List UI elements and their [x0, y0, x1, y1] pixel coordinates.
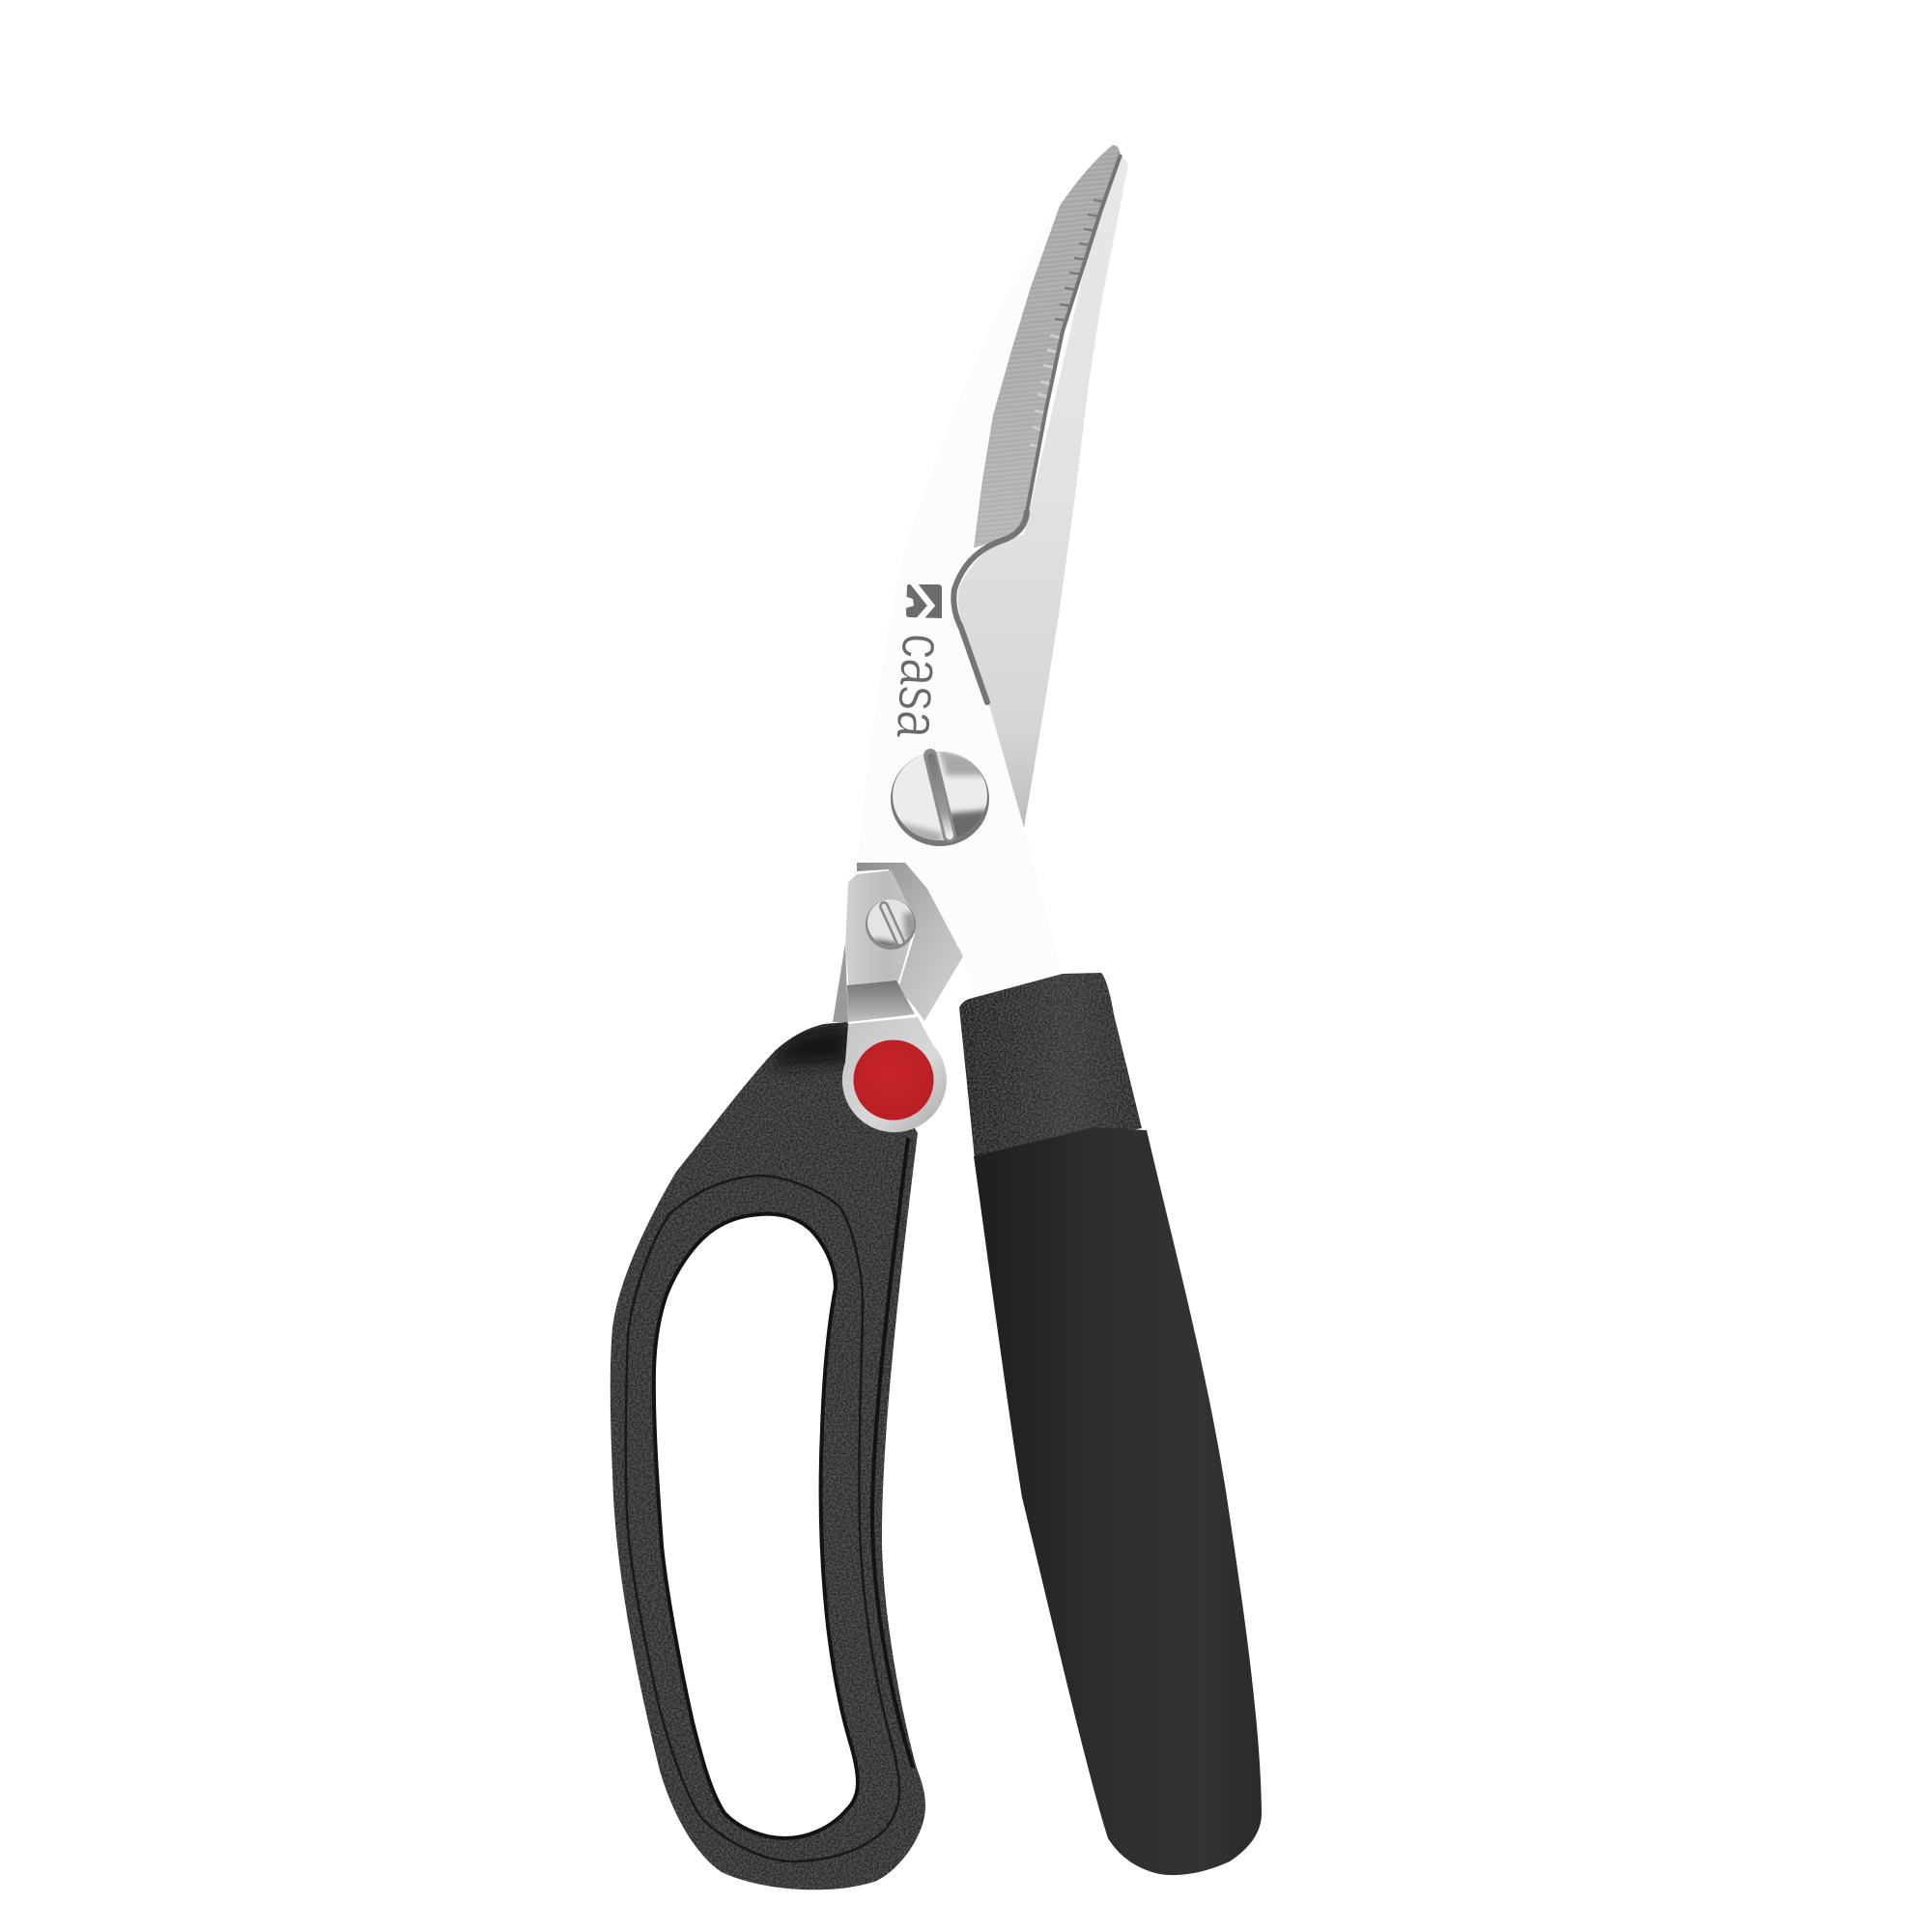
right handle: rubber grip	[974, 1127, 1262, 1875]
logo wordmark: casa	[883, 632, 956, 741]
brand mark: Casa logo	[883, 582, 956, 741]
logo icon	[904, 582, 942, 620]
red lock button	[854, 1039, 933, 1121]
brushed pivot plate	[857, 863, 963, 1021]
left handle: black moulded loop	[611, 1022, 925, 1889]
screw slot	[930, 755, 950, 836]
main pivot screw	[891, 750, 989, 850]
handle shadow near the collar	[773, 1022, 850, 1067]
screw reflections	[900, 752, 985, 840]
serrated cutting edge	[953, 145, 1121, 702]
handle moulded ridges	[626, 1138, 913, 1861]
right handle: textured sleeve	[959, 973, 1142, 1159]
lower blade: brushed steel	[958, 153, 1128, 828]
small screw reflections	[873, 910, 914, 946]
spring clip: steel latch	[833, 870, 947, 1132]
illustration: kitchen scissors	[611, 145, 1262, 1889]
small latch screw	[866, 899, 918, 952]
upper blade: polished white steel	[857, 145, 1113, 998]
